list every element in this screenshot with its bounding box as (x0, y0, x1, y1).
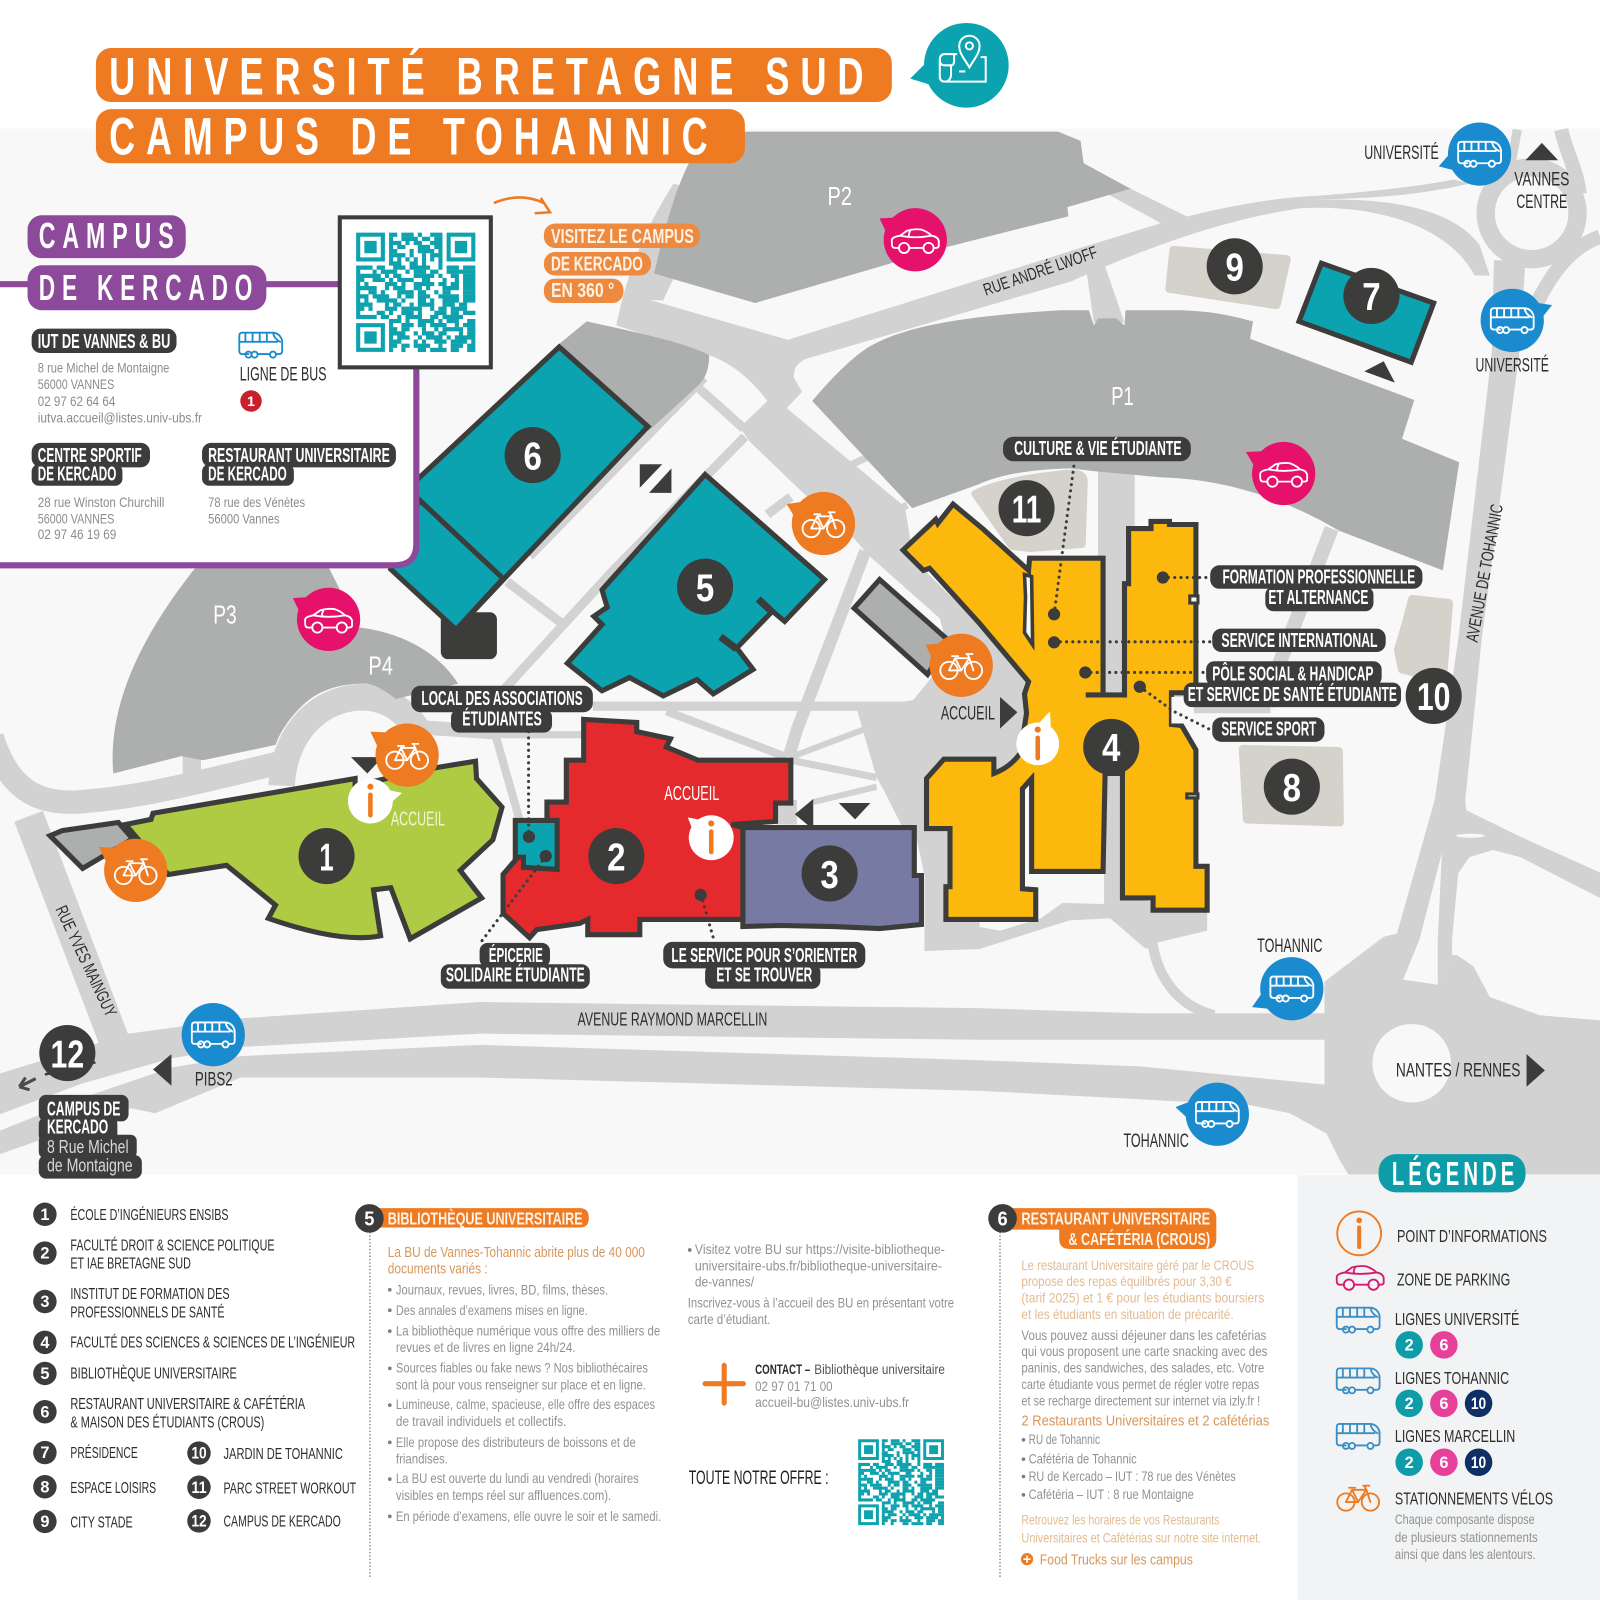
heading (988, 1204, 1216, 1249)
number markers on buildings: 12 (51, 1033, 84, 1076)
callout: service international (1212, 629, 1386, 652)
building list: 4 (40, 1334, 49, 1352)
arrow to 360 visit (494, 197, 550, 213)
information points (348, 711, 1059, 860)
place names: VANNES (1514, 169, 1569, 191)
campus map (0, 122, 1600, 1176)
legend: lignes marcellin: 10 (1471, 1454, 1486, 1472)
building 5 (567, 474, 824, 696)
legend: velos: Chaque composante dispose (1395, 1512, 1535, 1527)
roundabout centre (1372, 1024, 1451, 1103)
number markers on buildings: 2 (607, 836, 626, 879)
legend: lignes marcellin (1337, 1424, 1515, 1476)
title: UNIVERSITÉ BRETAGNE SUD (109, 46, 874, 106)
bullet list: Lumineuse, calme, spacieuse, elle offre des espaces (396, 1397, 655, 1412)
parking areas (113, 132, 1459, 773)
centre sportif address: 28 rue Winston Churchill (38, 495, 164, 511)
building list: 3 (40, 1293, 49, 1311)
building 7 (1299, 263, 1434, 362)
tariff text: et les étudiants en situation de précarité. (1021, 1307, 1234, 1322)
legend: lignes universite: LIGNES UNIVERSITÉ (1395, 1309, 1519, 1329)
building list: PARC STREET WORKOUT (223, 1480, 356, 1497)
legend: lignes universite: 6 (1439, 1337, 1448, 1355)
building list: ET IAE BRETAGNE SUD (70, 1255, 191, 1272)
road names: RUE YVES MAINGUY (51, 902, 121, 1020)
callout: formation professionnelle: ET ALTERNANCE (1268, 587, 1368, 609)
callout: visite 360: VISITEZ LE CAMPUS (551, 226, 694, 248)
bus line (239, 333, 327, 412)
contact: CONTACT – (755, 1362, 810, 1377)
callout: pole social: ET SERVICE DE SANTÉ ÉTUDIANTE (1188, 683, 1397, 706)
qr code offer (858, 1439, 944, 1525)
restaurant address (202, 443, 396, 527)
website text (688, 1242, 954, 1327)
bullet list: de travail individuels et collectifs. (396, 1414, 566, 1429)
parking labels: P1 (1111, 383, 1134, 411)
callout: pole social: PÔLE SOCIAL & HANDICAP (1212, 662, 1373, 686)
legend: parking: ZONE DE PARKING (1397, 1270, 1510, 1290)
qr code kercado (340, 217, 491, 367)
callout: campus de kercado 12: 8 Rue Michel (47, 1136, 129, 1157)
place names: UNIVERSITÉ (1476, 353, 1549, 376)
heading: 5 (364, 1209, 374, 1231)
introduction (388, 1245, 645, 1277)
centre sportif address: DE KERCADO (38, 464, 116, 486)
centre sportif address: 56000 VANNES (38, 511, 114, 527)
building list: ÉCOLE D’INGÉNIEURS ENSIBS (70, 1207, 229, 1224)
cafeteria text: qui vous proposent une carte snacking avec des (1021, 1344, 1267, 1359)
legend: lignes tohannic (1337, 1368, 1509, 1417)
restaurant address: DE KERCADO (208, 464, 287, 486)
locations list: 2 Restaurants Universitaires et 2 cafétérias (1021, 1414, 1269, 1430)
callout: le service pour s'orienter (663, 942, 865, 989)
callout: local des associations: ÉTUDIANTES (462, 708, 542, 731)
bullet list: Journaux, revues, livres, BD, films, thèses. (396, 1282, 608, 1297)
callout: formation professionnelle (1210, 565, 1422, 611)
heading pills: CAMPUS (39, 216, 181, 256)
building list: FACULTÉ DES SCIENCES & SCIENCES DE L’INGÉNIEUR (70, 1334, 355, 1351)
parking markers (293, 208, 1315, 651)
local des associations building (515, 820, 557, 869)
panel: bibliotheque universitaire (355, 1204, 954, 1579)
callout: campus de kercado 12: de Montaigne (47, 1154, 133, 1175)
legend: lignes universite: 2 (1405, 1337, 1414, 1355)
tariff text (1021, 1258, 1264, 1322)
bicycle markers (99, 492, 993, 902)
legend: lignes marcellin: LIGNES MARCELLIN (1395, 1426, 1515, 1446)
centre sportif address (32, 443, 164, 543)
parking labels: P3 (213, 601, 237, 629)
legend: lignes marcellin: 2 (1405, 1454, 1414, 1472)
heading (355, 1204, 589, 1233)
contact: 02 97 01 71 00 (755, 1379, 833, 1394)
callout: campus de kercado 12: KERCADO (47, 1117, 108, 1139)
IUT address (32, 329, 202, 426)
building list: 2 (40, 1245, 49, 1263)
building 4 (903, 504, 1207, 919)
building list: PRÉSIDENCE (70, 1445, 138, 1462)
tariff text: (tarif 2025) et 1 € pour les étudiants boursiers (1021, 1291, 1264, 1306)
building list: 11 (191, 1479, 207, 1497)
callout: epicerie solidaire: ÉPICERIE (489, 944, 543, 967)
locations list (1021, 1414, 1269, 1502)
cafeteria text: paninis, des sandwiches, des salades, etc. Votre (1021, 1360, 1265, 1375)
legend: lignes universite (1337, 1308, 1519, 1359)
parking labels (213, 183, 1134, 680)
place names: TOHANNIC (1257, 935, 1322, 957)
icon: plus (705, 1365, 743, 1403)
courtyard slit (1024, 574, 1033, 645)
building 6 (357, 347, 648, 659)
building list (33, 1203, 356, 1533)
bullet list: revues et de livres en ligne 24h/24. (396, 1340, 576, 1355)
building list: PROFESSIONNELS DE SANTÉ (70, 1304, 224, 1321)
bullet list: La BU est ouverte du lundi au vendredi (horaires (396, 1471, 639, 1486)
callout: visite 360: DE KERCADO (551, 253, 643, 275)
bus line: LIGNE DE BUS (240, 364, 327, 386)
opening hours note: Retrouvez les horaires de vos Restaurants (1021, 1512, 1219, 1527)
IUT address: 56000 VANNES (38, 377, 114, 393)
legend: parking (1337, 1266, 1510, 1290)
building list: 1 (40, 1206, 49, 1224)
directional arrows (19, 143, 1558, 1090)
building list: JARDIN DE TOHANNIC (223, 1446, 343, 1463)
place names: ACCUEIL (664, 783, 719, 805)
IUT address: 02 97 62 64 64 (38, 394, 115, 410)
centre sportif address: 02 97 46 19 69 (38, 527, 116, 543)
contact (755, 1362, 945, 1410)
legend: lignes tohannic: LIGNES TOHANNIC (1395, 1368, 1509, 1388)
place names: UNIVERSITÉ (1364, 141, 1439, 164)
panel frame (0, 284, 416, 565)
number markers on buildings: 11 (1012, 488, 1041, 531)
bullet list: Elle propose des distributeurs de boissons et de (396, 1435, 636, 1450)
callout: campus de kercado 12 (39, 1095, 142, 1179)
number markers on buildings (39, 238, 1462, 1081)
place names: ACCUEIL (391, 809, 445, 831)
number markers on buildings: 3 (820, 854, 839, 897)
bullet list: friandises. (396, 1451, 448, 1466)
bullet list: sont là pour vous renseigner sur place et en ligne. (396, 1377, 646, 1392)
place names (195, 141, 1569, 1152)
legend: velos (1337, 1486, 1553, 1562)
callout: visite 360 (544, 223, 700, 303)
place names: CENTRE (1516, 191, 1567, 213)
restaurant address: RESTAURANT UNIVERSITAIRE (208, 445, 390, 467)
number markers on buildings: 5 (696, 567, 714, 610)
parking labels: P2 (828, 183, 852, 211)
building list: 5 (40, 1365, 49, 1383)
legend: lignes tohannic: 6 (1439, 1395, 1448, 1413)
callout: le service pour s'orienter: LE SERVICE POUR S’ORIENTER (671, 945, 857, 967)
panel: campus de kercado (0, 215, 416, 565)
panel: restaurant universitaire (988, 1204, 1269, 1579)
bullet list: En période d’examens, elle ouvre le soir et le samedi. (396, 1509, 661, 1524)
restaurant address: 78 rue des Vénètes (208, 495, 305, 511)
cafeteria text: carte étudiante vous permet de régler votre repas (1021, 1377, 1259, 1392)
grey annex near building 4 (854, 580, 949, 674)
tariff text: propose des repas équilibrés pour 3,30 € (1021, 1274, 1232, 1289)
building list: CAMPUS DE KERCADO (223, 1514, 341, 1531)
beige outdoor zones 8 9 10 11 (976, 250, 1449, 822)
road names: RUE ANDRÉ LWOFF (981, 242, 1100, 300)
cafeteria text: Vous pouvez aussi déjeuner dans les cafetérias (1021, 1328, 1266, 1343)
callout: local des associations: LOCAL DES ASSOCIATIONS (421, 688, 583, 710)
number markers on buildings: 9 (1226, 247, 1244, 290)
contact: Bibliothèque universitaire (814, 1362, 945, 1377)
callout: le service pour s'orienter: ET SE TROUVER (716, 965, 812, 987)
heading: & CAFÉTÉRIA (CROUS) (1068, 1229, 1210, 1249)
number markers on buildings: 6 (523, 435, 542, 478)
heading: 6 (997, 1209, 1008, 1231)
building list: INSTITUT DE FORMATION DES (70, 1286, 230, 1303)
bottom information area (0, 1174, 1600, 1600)
legend: lignes marcellin: 6 (1439, 1454, 1448, 1472)
callout: epicerie solidaire (441, 943, 590, 989)
bus line: 1 (247, 394, 255, 410)
building list: CITY STADE (70, 1515, 133, 1532)
callout: pole social (1184, 661, 1401, 707)
title (96, 46, 892, 167)
road names: AVENUE DE TOHANNIC (1462, 502, 1507, 644)
place names: NANTES / RENNES (1396, 1060, 1520, 1082)
IUT address: 8 rue Michel de Montaigne (38, 360, 169, 376)
callout: service sport (1212, 717, 1324, 742)
locations list: Cafétéria – IUT : 8 rue Montaigne (1029, 1487, 1194, 1502)
cafeteria text (1021, 1328, 1267, 1409)
callout: local des associations (411, 686, 593, 733)
locations list: Cafétéria de Tohannic (1029, 1451, 1137, 1466)
callout: culture et vie etudiante (1003, 437, 1191, 461)
building 2 (503, 719, 791, 938)
building list: 9 (40, 1513, 49, 1531)
building list: RESTAURANT UNIVERSITAIRE & CAFÉTÉRIA (70, 1396, 306, 1413)
bullet list: Sources fiables ou fake news ? Nos bibliothécaires (396, 1360, 648, 1375)
bus markers (182, 122, 1552, 1146)
legend: information: POINT D’INFORMATIONS (1397, 1226, 1547, 1246)
tariff text: Le restaurant Universitaire géré par le CROUS (1021, 1258, 1254, 1273)
callout: epicerie solidaire: SOLIDAIRE ÉTUDIANTE (446, 964, 585, 987)
legend heading: LÉGENDE (1392, 1155, 1518, 1193)
road names (51, 242, 1507, 1030)
legend: lignes tohannic: 2 (1405, 1395, 1414, 1413)
restaurant address: 56000 Vannes (208, 511, 280, 527)
contact: accueil-bu@listes.univ-ubs.fr (755, 1395, 910, 1410)
building list: ESPACE LOISIRS (70, 1480, 156, 1497)
bullet list: Des annales d’examens mises en ligne. (396, 1303, 588, 1318)
building list: 6 (40, 1403, 49, 1421)
website text: de-vannes/ (695, 1275, 754, 1290)
number markers on buildings: 7 (1362, 276, 1381, 319)
bullet list: La bibliothèque numérique vous offre des milliers de (396, 1324, 660, 1339)
food trucks: Food Trucks sur les campus (1040, 1552, 1193, 1568)
road names: AVENUE RAYMOND MARCELLIN (578, 1009, 767, 1030)
legend: velos: ainsi que dans les alentours. (1395, 1547, 1536, 1562)
road network (0, 180, 1600, 1176)
website text: carte d’étudiant. (688, 1312, 770, 1327)
building list: 8 (40, 1478, 49, 1496)
website text: Visitez votre BU sur https://visite-bibliotheque- (695, 1242, 945, 1257)
introduction: documents variés : (388, 1261, 488, 1277)
building 1 (126, 761, 502, 939)
legend: information (1337, 1211, 1547, 1255)
building list: & MAISON DES ÉTUDIANTS (CROUS) (70, 1415, 264, 1432)
callout: campus de kercado 12: CAMPUS DE (47, 1098, 120, 1120)
heading pills: DE KERCADO (39, 268, 259, 308)
grey annex of building 1 (50, 822, 133, 868)
number markers on buildings: 4 (1102, 727, 1121, 770)
centre sportif address: CENTRE SPORTIF (38, 445, 142, 467)
place names: TOHANNIC (1123, 1130, 1189, 1152)
website text: universitaire-ubs.fr/bibliotheque-universitaire- (695, 1258, 942, 1273)
icon: map bubble (910, 23, 1009, 108)
building list: 10 (191, 1445, 207, 1463)
opening hours note: Universitaires et Cafétérias sur notre site internet. (1021, 1530, 1261, 1545)
building list: FACULTÉ DROIT & SCIENCE POLITIQUE (70, 1238, 274, 1255)
heading: BIBLIOTHÈQUE UNIVERSITAIRE (388, 1208, 583, 1228)
building list: 7 (40, 1444, 49, 1462)
parking labels: P4 (368, 652, 393, 680)
heading pills (28, 215, 266, 310)
IUT address: iutva.accueil@listes.univ-ubs.fr (38, 410, 202, 426)
title: CAMPUS DE TOHANNIC (109, 108, 718, 167)
callout dotted leaders (480, 461, 1212, 944)
building list: 12 (191, 1513, 207, 1531)
offer heading: TOUTE NOTRE OFFRE : (689, 1467, 829, 1489)
website text: Inscrivez-vous à l’accueil des BU en présentant votre (688, 1296, 954, 1311)
locations list: RU de Tohannic (1029, 1432, 1100, 1447)
building 3 (743, 828, 921, 929)
number markers on buildings: 8 (1283, 767, 1301, 810)
callout: culture et vie etudiante: CULTURE & VIE ÉTUDIANTE (1014, 437, 1182, 460)
callout: service international: SERVICE INTERNATIONAL (1221, 630, 1378, 652)
locations list: RU de Kercado – IUT : 78 rue des Vénètes (1029, 1469, 1236, 1484)
callout: service sport: SERVICE SPORT (1221, 719, 1317, 741)
place names: PIBS2 (195, 1069, 233, 1091)
legend: lignes tohannic: 10 (1471, 1395, 1486, 1413)
legend heading (1379, 1154, 1526, 1193)
opening hours note (1021, 1512, 1261, 1545)
map ground (0, 129, 1600, 1176)
building list: BIBLIOTHÈQUE UNIVERSITAIRE (70, 1366, 237, 1383)
bullet list: visibles en temps réel sur affluences.com). (396, 1488, 611, 1503)
heading: RESTAURANT UNIVERSITAIRE (1021, 1208, 1210, 1228)
cafeteria text: et se recharge directement sur internet via izly.fr ! (1021, 1394, 1260, 1409)
legend: velos: de plusieurs stationnements (1395, 1530, 1538, 1545)
introduction: La BU de Vannes-Tohannic abrite plus de 40 000 (388, 1245, 645, 1261)
roundabout islands and secondary roads (0, 130, 1600, 1041)
panel: legende (1297, 1154, 1600, 1600)
place names: ACCUEIL (941, 702, 995, 724)
bullet list (388, 1282, 661, 1524)
number markers on buildings: 10 (1417, 676, 1451, 719)
callout: formation professionnelle: FORMATION PROFESSIONNELLE (1222, 567, 1415, 589)
IUT address: IUT DE VANNES & BU (38, 331, 170, 353)
callout: visite 360: EN 360 ° (551, 280, 614, 302)
number markers on buildings: 1 (319, 836, 334, 879)
